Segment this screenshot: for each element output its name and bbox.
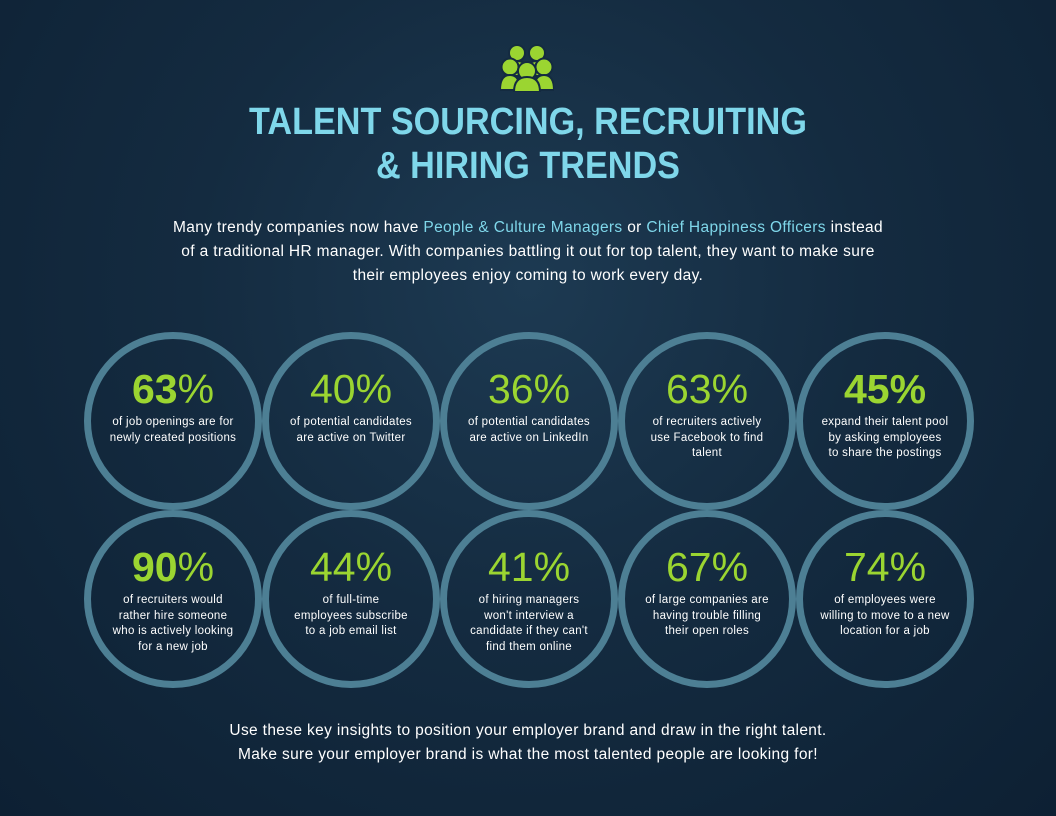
stat: 36% <box>440 332 618 510</box>
stat: 67% <box>618 510 796 688</box>
stat: 40%: are active on Twitter <box>296 432 406 444</box>
stat: 67%: their open roles <box>665 625 749 637</box>
stat: 74%: location for a job <box>840 625 930 637</box>
stat: 63% <box>84 332 262 510</box>
stat: 90%: of recruiters would <box>123 594 223 606</box>
icon: people group <box>501 46 553 91</box>
stat: 74%: of employees were <box>834 594 936 606</box>
closing text <box>229 722 827 763</box>
stat: 44%: to a job email list <box>305 625 397 637</box>
stat: 45%: 45% <box>844 366 926 412</box>
closing text: Make sure your employer brand is what the most talented people are looking for! <box>238 746 818 763</box>
stat: 90%: who is actively looking <box>113 625 233 637</box>
stat: 41%: won't interview a <box>484 610 574 622</box>
stat: 41%: 41% <box>488 544 570 590</box>
stat: 74%: willing to move to a new <box>820 610 950 622</box>
intro text: of a traditional HR manager. With companies battling it out for top talent, they want to make sure <box>181 243 875 260</box>
stat: 63% facebook: use Facebook to find <box>651 432 763 444</box>
stat: 74% <box>796 510 974 688</box>
stat: 90%: for a new job <box>138 640 208 652</box>
title <box>249 101 807 187</box>
stat: 41%: find them online <box>486 640 572 652</box>
stat: 40%: of potential candidates <box>290 416 412 428</box>
stat: 67%: of large companies are <box>645 594 769 606</box>
stat: 45%: to share the postings <box>828 447 942 459</box>
stat: 40%: 40% <box>310 366 392 412</box>
stat: 63% facebook: talent <box>692 447 722 459</box>
stat: 90%: 90% <box>132 544 214 590</box>
stat: 63% facebook <box>618 332 796 510</box>
stat: 74%: 74% <box>844 544 926 590</box>
stat: 44%: employees subscribe <box>294 610 408 622</box>
stat: 90%: rather hire someone <box>119 610 227 622</box>
stat: 67%: 67% <box>666 544 748 590</box>
intro text <box>173 219 883 284</box>
stat: 63%: 63% <box>132 366 214 412</box>
stat: 45%: expand their talent pool <box>822 416 948 428</box>
stat: 63%: newly created positions <box>110 432 236 444</box>
stat: 45%: by asking employees <box>828 432 942 444</box>
stat: 36%: of potential candidates <box>468 416 590 428</box>
stat: 44% <box>262 510 440 688</box>
title: TALENT SOURCING, RECRUITING <box>249 101 807 143</box>
stat: 36%: are active on LinkedIn <box>469 432 589 444</box>
stat: 45% <box>796 332 974 510</box>
stat: 63% facebook: 63% <box>666 366 748 412</box>
stat: 63% facebook: of recruiters actively <box>653 416 761 428</box>
intro text: their employees enjoy coming to work every day. <box>353 267 703 284</box>
title: & HIRING TRENDS <box>376 145 680 187</box>
stat: 44%: of full-time <box>323 594 379 606</box>
intro text: Many trendy companies now have People & Culture Managers or Chief Happiness Officers instead <box>173 219 883 236</box>
stat: 40% <box>262 332 440 510</box>
stat: 41%: of hiring managers <box>479 594 579 606</box>
stat: 41%: candidate if they can't <box>470 625 588 637</box>
stat: 90% <box>84 510 262 688</box>
stat: 63%: of job openings are for <box>112 416 234 428</box>
stat: 67%: having trouble filling <box>653 610 761 622</box>
closing text: Use these key insights to position your employer brand and draw in the right talent. <box>229 722 827 739</box>
stat: 44%: 44% <box>310 544 392 590</box>
stat: 36%: 36% <box>488 366 570 412</box>
stat: 41% <box>440 510 618 688</box>
